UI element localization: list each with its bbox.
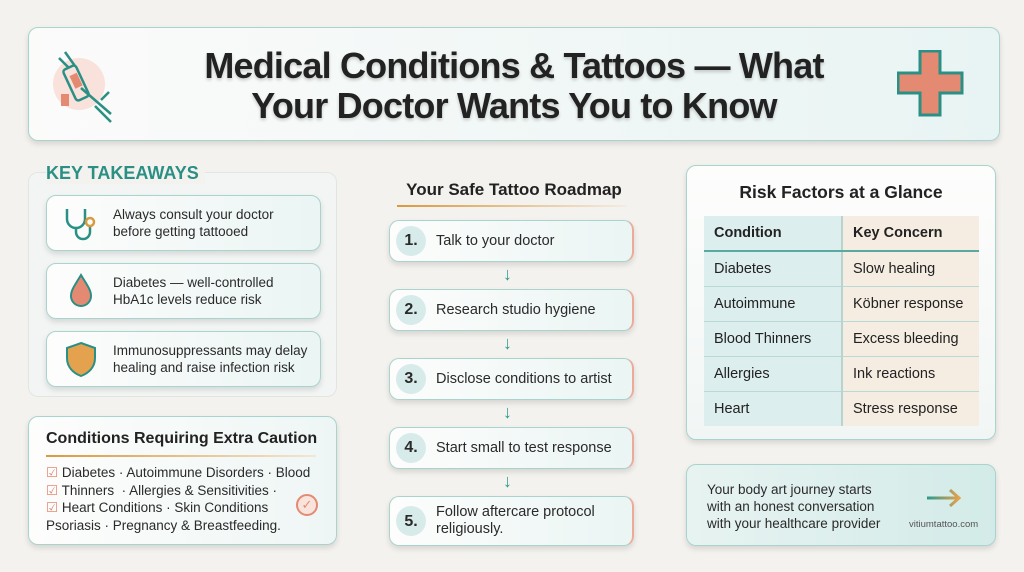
step 5: religiously. <box>436 521 503 537</box>
step 5 <box>389 496 634 546</box>
conditions list <box>46 465 310 533</box>
step 3: 3. <box>404 370 418 387</box>
title <box>204 45 825 126</box>
title: Medical Conditions & Tattoos — What <box>204 45 824 86</box>
heading: roadmap: Your Safe Tattoo Roadmap <box>406 180 622 199</box>
takeaway: diabetes <box>46 263 321 319</box>
callout text: with an honest conversation <box>707 499 874 514</box>
takeaway: consult doctor: Always consult your doctor <box>113 207 274 222</box>
risk table: Excess bleeding <box>853 330 959 346</box>
heading: Risk Factors at a Glance <box>739 182 943 202</box>
risk table <box>704 216 979 426</box>
takeaway: diabetes: HbA1c levels reduce risk <box>113 292 262 307</box>
step 2: Research studio hygiene <box>436 302 596 318</box>
website: vitiumtattoo.com <box>909 519 978 530</box>
heading: key takeaways: KEY TAKEAWAYS <box>46 163 199 183</box>
risk table: Condition <box>714 225 782 241</box>
risk table: Diabetes <box>714 261 771 277</box>
risk table: Stress response <box>853 401 958 417</box>
callout text <box>707 482 880 531</box>
takeaway: immunosuppressants <box>46 331 321 387</box>
step 1: Talk to your doctor <box>436 233 554 249</box>
conditions list: Psoriasis · Pregnancy & Breastfeeding. <box>46 518 281 532</box>
risk table: Autoimmune <box>714 296 795 312</box>
header banner <box>28 27 1000 141</box>
icon: arrow <box>927 489 962 507</box>
step 1 <box>389 220 634 262</box>
callout text: with your healthcare provider <box>707 516 880 531</box>
step 5: 5. <box>404 512 418 530</box>
panel: key takeaways <box>28 172 337 397</box>
title: Your Doctor Wants You to Know <box>251 85 777 126</box>
risk table: Ink reactions <box>853 366 935 382</box>
arrow 3: ↓ <box>503 402 512 422</box>
risk table: Blood Thinners <box>714 330 811 346</box>
risk table: Heart <box>714 401 749 417</box>
takeaway: diabetes: Diabetes — well-controlled <box>113 275 274 290</box>
icon: medical cross <box>897 50 964 116</box>
icon: check badge: ✓ <box>302 497 312 512</box>
roadmap steps <box>388 220 636 550</box>
conditions list: ☑ Heart Conditions · Skin Conditions <box>46 500 268 515</box>
step 3 <box>389 358 634 400</box>
takeaway: immunosuppressants: Immunosuppressants may delay <box>113 343 307 358</box>
icon: tattoo machine <box>53 51 112 123</box>
footer callout <box>686 464 996 546</box>
arrow 2: ↓ <box>503 333 512 353</box>
icon: check badge <box>296 494 318 516</box>
step 4 <box>389 427 634 469</box>
takeaway: consult doctor: before getting tattooed <box>113 224 248 239</box>
step 3: Disclose conditions to artist <box>436 371 612 387</box>
arrow 4: ↓ <box>503 471 512 491</box>
heading: Conditions Requiring Extra Caution <box>46 430 317 447</box>
step 2: 2. <box>404 301 418 318</box>
step 2 <box>389 289 634 331</box>
step 1: 1. <box>404 232 418 249</box>
callout text: Your body art journey starts <box>707 482 872 497</box>
arrow 1: ↓ <box>503 264 512 284</box>
step 4: Start small to test response <box>436 440 612 456</box>
risk table: Allergies <box>714 366 770 382</box>
panel: conditions requiring extra caution <box>28 416 337 545</box>
step 5: Follow aftercare protocol <box>436 504 595 520</box>
risk table: Slow healing <box>853 261 935 277</box>
step 4: 4. <box>404 439 418 456</box>
conditions list: ☑ Diabetes · Autoimmune Disorders · Blood <box>46 465 310 480</box>
risk table: Köbner response <box>853 296 963 312</box>
takeaway: consult doctor <box>46 195 321 251</box>
conditions list: ☑ Thinners · Allergies & Sensitivities · <box>46 482 277 498</box>
risk table: Key Concern <box>853 225 942 241</box>
takeaway: immunosuppressants: healing and raise infection risk <box>113 360 295 375</box>
panel: risk factors <box>686 165 996 440</box>
